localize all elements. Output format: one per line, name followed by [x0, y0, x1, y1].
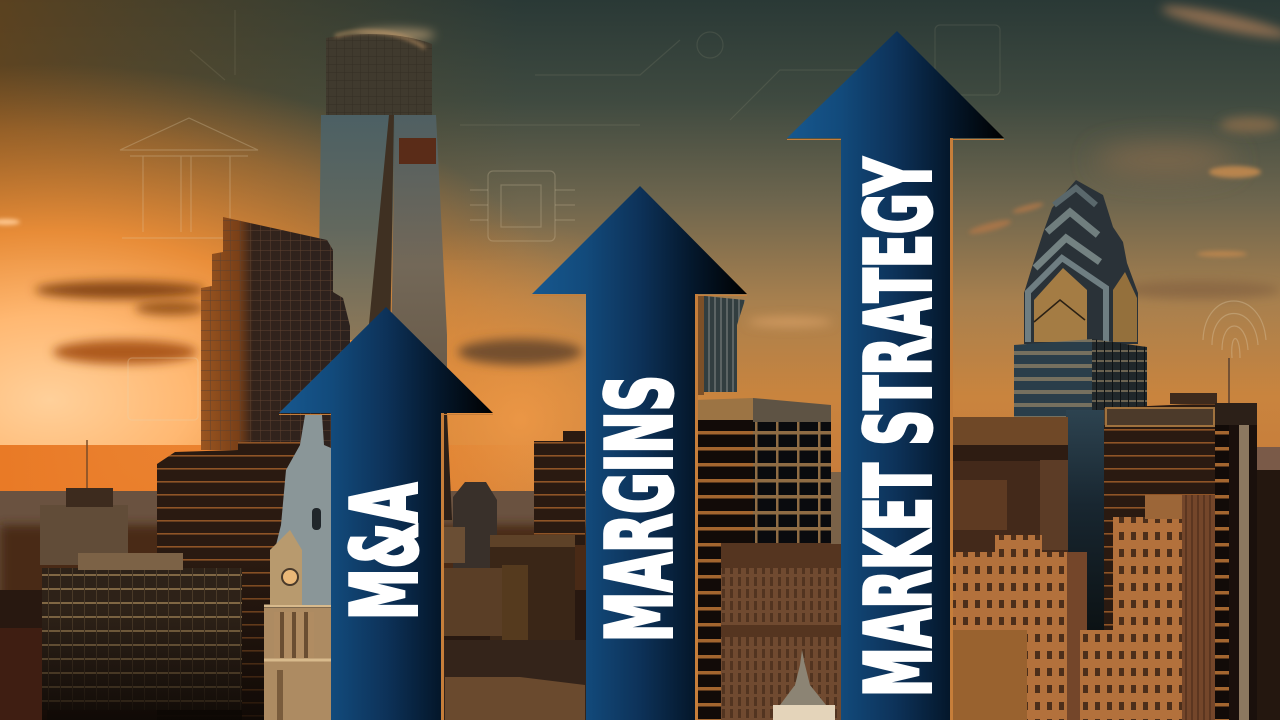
centre brown building — [721, 543, 841, 720]
distant centre sliver — [831, 472, 841, 544]
right stripe tower — [1104, 393, 1257, 720]
left old building — [952, 417, 1068, 607]
faint technology line icons — [120, 10, 1266, 420]
label: Margins: MARGINS — [588, 375, 693, 642]
Comcast tower — [318, 32, 452, 520]
orange edge light — [787, 138, 1004, 720]
dark lower tower — [157, 442, 300, 720]
centre grid tower — [695, 398, 831, 720]
centre tower behind arrow — [695, 295, 745, 395]
Liberty Place tower — [1014, 180, 1229, 650]
brown stepped tower — [201, 217, 350, 450]
arrow: M&A — [279, 307, 493, 720]
skyline right: far right dark blocks — [1257, 447, 1280, 720]
icon: fingerprint — [1203, 301, 1266, 358]
arrow: Market Strategy — [787, 31, 1004, 720]
low grey block — [42, 553, 242, 720]
icon: bank temple — [120, 118, 258, 238]
skyline centre: low buildings — [441, 431, 586, 720]
statue and pedestal — [773, 650, 835, 720]
clouds — [0, 1, 1280, 365]
City Hall tower — [264, 415, 331, 720]
icon: circuit traces — [128, 10, 1000, 420]
bottom left building — [0, 628, 47, 720]
label: M&A: M&A — [333, 483, 438, 620]
orange edge light — [532, 294, 747, 720]
icon: microchip — [470, 171, 575, 241]
orange edge light — [279, 413, 493, 720]
tan buildings — [952, 495, 1215, 720]
distant block — [40, 440, 128, 565]
arrow: Margins — [532, 186, 747, 720]
horizon and distant city — [0, 491, 1280, 720]
